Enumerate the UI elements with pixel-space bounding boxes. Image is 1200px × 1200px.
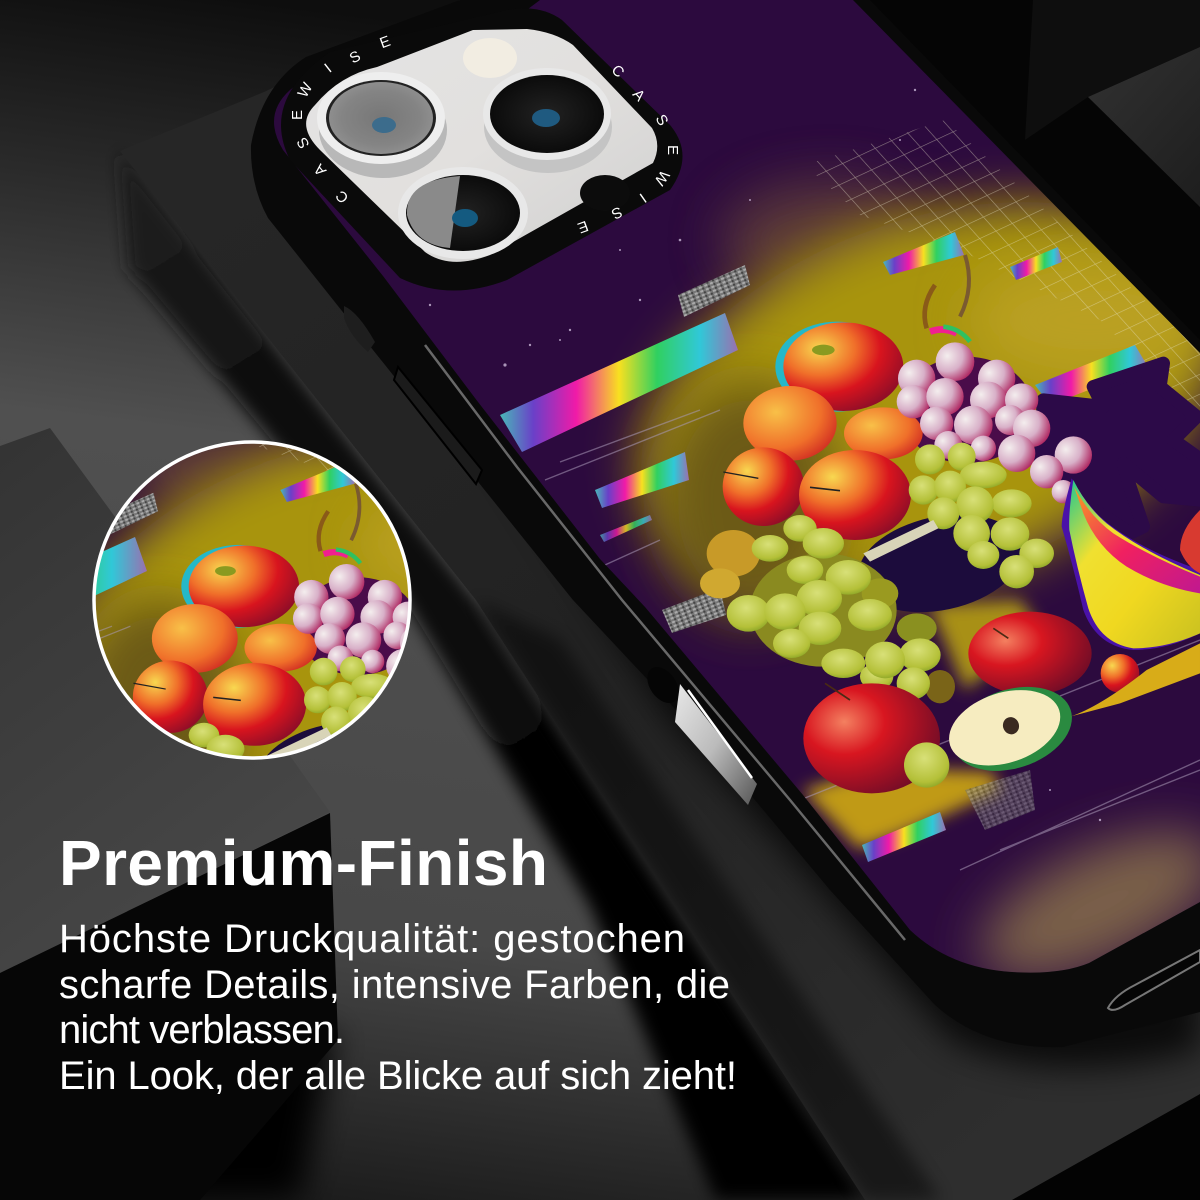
lens bottom (398, 167, 528, 259)
side volume button (394, 367, 482, 484)
pear (1062, 478, 1200, 650)
island frame (281, 8, 682, 291)
CASEWISE ring text: I (321, 60, 335, 76)
body copy (59, 917, 737, 1098)
CASEWISE ring text: I (636, 189, 649, 206)
stars (429, 89, 1101, 821)
CASEWISE ring text: E (378, 33, 393, 52)
CASEWISE ring text: W (295, 79, 317, 101)
stems and ribbon (925, 255, 970, 342)
CASEWISE ring text: S (347, 48, 364, 67)
flash (463, 38, 517, 78)
phone case body (251, 0, 1200, 1047)
phone shadow (440, 360, 1200, 1068)
grape cluster backing (750, 553, 897, 667)
dark grapes (1040, 363, 1200, 533)
body copy: scharfe Details, intensive Farben, die (59, 963, 730, 1007)
CASEWISE ring text (289, 33, 681, 236)
CASEWISE ring text: E (664, 145, 681, 155)
fruit still life (700, 255, 1200, 793)
label strip (863, 520, 938, 562)
headline: Premium-Finish (59, 827, 548, 899)
yellow band (1070, 643, 1200, 717)
green grapes lower (700, 515, 955, 703)
body copy: Höchste Druckqualität: gestochen (59, 917, 685, 961)
CASEWISE ring text: S (294, 134, 313, 151)
lens plate (306, 29, 657, 262)
CASEWISE ring text: A (311, 160, 330, 179)
rim highlight (425, 345, 905, 940)
chrome side button (641, 661, 757, 805)
body copy: nicht verblassen. (59, 1008, 345, 1052)
CASEWISE ring text: W (650, 167, 673, 189)
artwork background (250, 0, 1200, 1010)
lower apples (803, 612, 1139, 793)
charging port (1108, 950, 1200, 1010)
apples (723, 322, 923, 540)
lens left (317, 72, 447, 178)
CASEWISE ring text: S (652, 112, 671, 129)
CASEWISE ring text: S (609, 203, 625, 222)
phone screen artwork (250, 0, 1200, 1010)
zoom circle inset (92, 440, 412, 760)
CASEWISE ring text: C (332, 187, 352, 206)
lens right (483, 68, 612, 173)
glitch stripes (500, 232, 1200, 870)
camera island (281, 8, 682, 291)
purple grapes (897, 342, 1092, 503)
CASEWISE ring text: A (629, 86, 648, 105)
bowl (849, 500, 1031, 626)
grid overlay (805, 120, 1200, 420)
microphone dark dot (580, 175, 630, 211)
CASEWISE ring text: E (575, 217, 590, 236)
CASEWISE ring text: E (289, 110, 306, 120)
side switch (344, 306, 375, 352)
grape backing (900, 357, 1033, 463)
CASEWISE ring text: C (608, 62, 628, 81)
green grapes upper (909, 443, 1054, 588)
body copy: Ein Look, der alle Blicke auf sich zieht! (59, 1054, 737, 1098)
halved apple (949, 686, 1072, 771)
